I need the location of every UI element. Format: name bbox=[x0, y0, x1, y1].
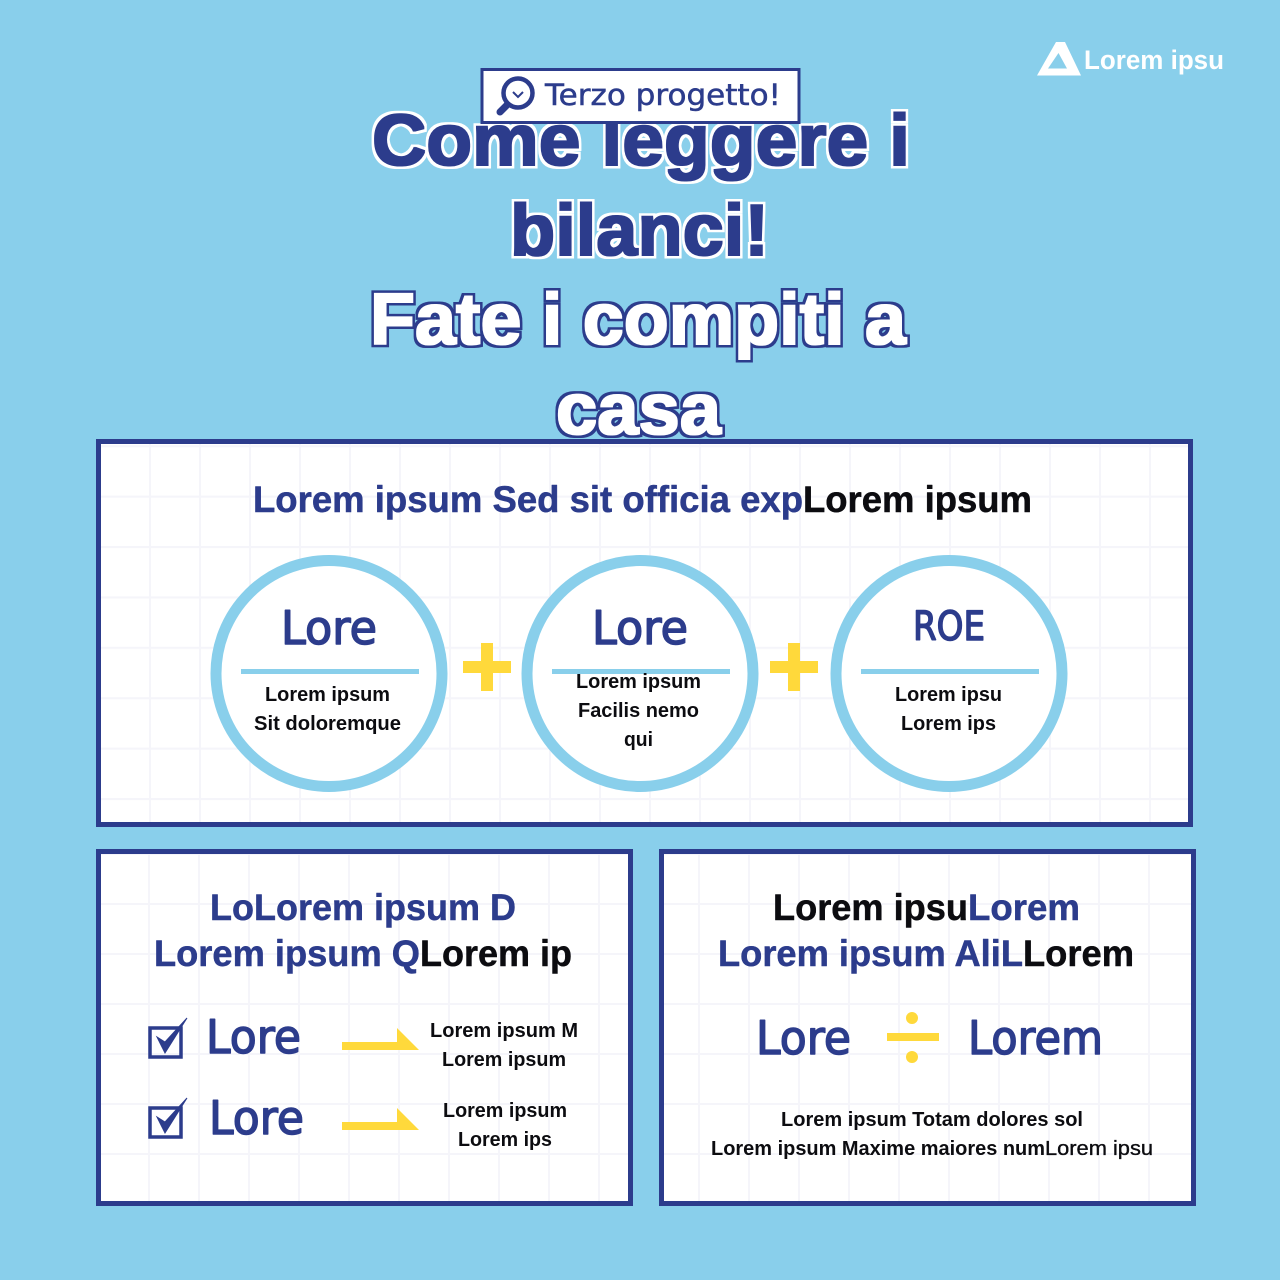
circle text: Facilis nemo bbox=[578, 700, 699, 722]
badge box bbox=[482, 70, 799, 122]
circle text: Sit doloremque bbox=[254, 713, 401, 735]
circle ring bbox=[527, 560, 753, 786]
panel heading: Lorem ipsum Sed sit officia exp bbox=[253, 479, 803, 520]
panel text: Lorem ipsu bbox=[1045, 1138, 1153, 1160]
arrow bbox=[342, 1028, 419, 1050]
logo bbox=[1037, 42, 1224, 76]
circle 1 bbox=[216, 560, 442, 786]
panel heading: LoLorem ipsum D bbox=[210, 887, 516, 928]
circle text: qui bbox=[624, 729, 653, 751]
icon: checkbox bbox=[150, 1098, 187, 1137]
title bbox=[370, 101, 910, 450]
row 2 bbox=[150, 1091, 567, 1151]
panel: division bbox=[662, 852, 1194, 1204]
row text: Lorem ipsum M bbox=[430, 1020, 578, 1042]
panel heading: Lorem ipsum AliL bbox=[718, 933, 1023, 974]
title line 2: bilanci! bbox=[510, 191, 769, 271]
panel heading: Lorem bbox=[1023, 933, 1134, 974]
panel box bbox=[662, 852, 1194, 1204]
icon: magnifier with clock bbox=[500, 78, 532, 112]
row 1 bbox=[150, 1010, 578, 1071]
row label: Lore bbox=[206, 1010, 301, 1064]
title line 1: Come leggere i bbox=[372, 101, 910, 181]
logo text: Lorem ipsu bbox=[1084, 45, 1224, 75]
circle title: ROE bbox=[913, 604, 985, 650]
panel: top formula bbox=[98, 442, 1190, 824]
panel heading: Lorem ipsum bbox=[803, 479, 1032, 520]
badge text: Terzo progetto! bbox=[544, 78, 781, 112]
row text: Lorem ipsum bbox=[442, 1049, 566, 1071]
numerator label: Lore bbox=[756, 1011, 851, 1065]
denominator label: Lorem bbox=[968, 1011, 1103, 1065]
circle title: Lore bbox=[592, 601, 688, 655]
icon: division sign bbox=[887, 1012, 939, 1063]
panel heading: Lorem ipsu bbox=[773, 887, 968, 928]
circle title: Lore bbox=[281, 601, 377, 655]
icon: plus 1 bbox=[463, 643, 511, 691]
panel heading: Lorem ipsum Q bbox=[154, 933, 420, 974]
icon: logo triangle bbox=[1037, 42, 1081, 76]
row text: Lorem ips bbox=[458, 1129, 552, 1151]
circle text: Lorem ipsum bbox=[576, 671, 701, 693]
title line 4: casa bbox=[556, 370, 722, 450]
row label: Lore bbox=[209, 1091, 304, 1145]
circle text: Lorem ipsum bbox=[265, 684, 390, 706]
circle ring bbox=[216, 560, 442, 786]
panel text: Lorem ipsum Totam dolores sol bbox=[781, 1109, 1083, 1131]
circle 2 bbox=[527, 560, 753, 786]
panel: checklist bbox=[98, 852, 630, 1204]
panel box bbox=[98, 442, 1190, 824]
circle 3 bbox=[836, 560, 1062, 786]
row text: Lorem ipsum bbox=[443, 1100, 567, 1122]
circle text: Lorem ipsu bbox=[895, 684, 1002, 706]
panel heading: Lorem ip bbox=[420, 933, 572, 974]
title line 3: Fate i compiti a bbox=[370, 280, 907, 360]
badge: Terzo progetto bbox=[482, 70, 799, 122]
panel text: Lorem ipsum Maxime maiores num bbox=[711, 1138, 1045, 1160]
panel box bbox=[98, 852, 630, 1204]
panel heading: Lorem bbox=[968, 887, 1080, 928]
circle ring bbox=[836, 560, 1062, 786]
circle text: Lorem ips bbox=[901, 713, 996, 735]
icon: checkbox bbox=[150, 1018, 187, 1057]
divider bbox=[861, 669, 1039, 674]
divider bbox=[241, 669, 419, 674]
divider bbox=[552, 669, 730, 674]
arrow bbox=[342, 1108, 419, 1130]
icon: plus 2 bbox=[770, 643, 818, 691]
